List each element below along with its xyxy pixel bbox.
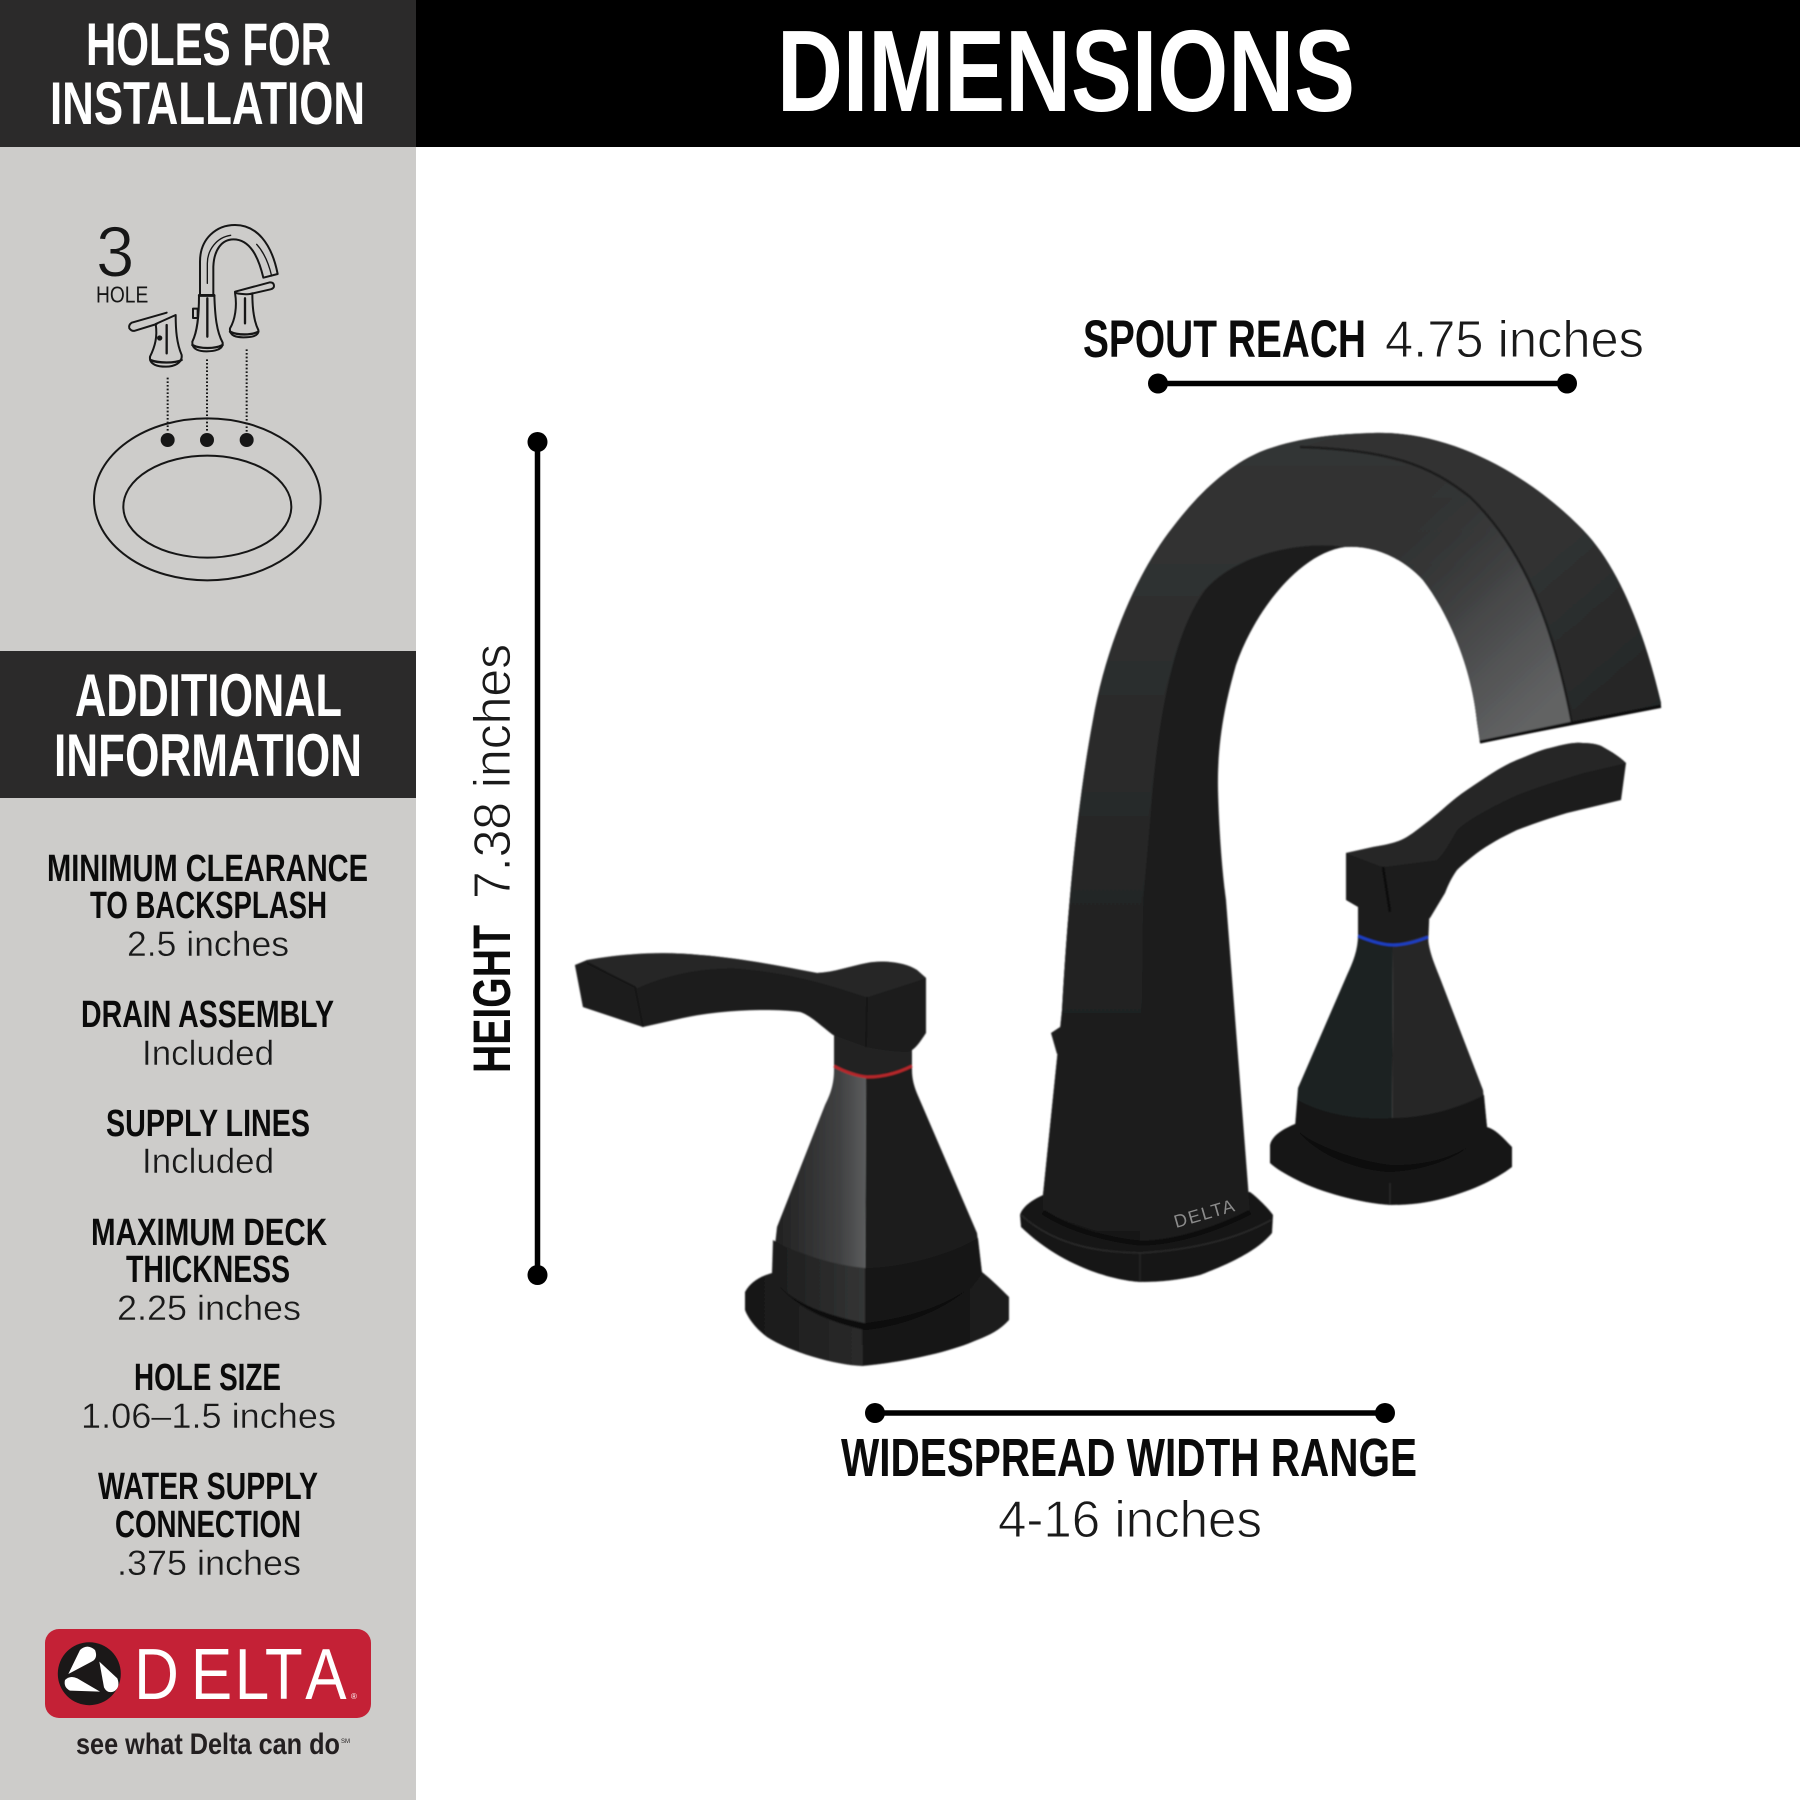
faucet: left handle — [575, 953, 1009, 1366]
dimension: height: 7.38 inches — [464, 644, 522, 899]
heading: holes for installation: INSTALLATION — [50, 70, 365, 137]
text block: supply lines: Included — [142, 1142, 274, 1181]
heading: holes for installation — [0, 0, 416, 147]
logo: delta: DELTA — [134, 1635, 347, 1715]
text block: minimum clearance: TO BACKSPLASH — [90, 885, 327, 927]
text block: hole size: 1.06–1.5 inches — [81, 1397, 336, 1436]
text block: hole size: HOLE SIZE — [134, 1357, 281, 1399]
panel: sidebar background — [0, 147, 416, 1800]
dimension: height: HEIGHT — [463, 925, 522, 1073]
text block: water supply connection — [98, 1466, 318, 1583]
text block: minimum clearance: 2.5 inches — [127, 925, 289, 964]
dimension: widespread width range: 4-16 inches — [998, 1491, 1262, 1549]
text block: maximum deck thickness: MAXIMUM DECK — [91, 1212, 327, 1254]
text block: maximum deck thickness: 2.25 inches — [117, 1289, 301, 1328]
faucet: right handle — [1270, 743, 1626, 1205]
text block: hole size — [81, 1357, 336, 1436]
heading: dimensions: DIMENSIONS — [777, 6, 1355, 136]
icon: 3 hole faucet and sink diagram: HOLE — [96, 281, 148, 307]
icon: 3 hole faucet and sink diagram — [94, 213, 321, 580]
heading: holes for installation: HOLES FOR — [86, 11, 331, 78]
dimension: widespread width range — [841, 1403, 1417, 1549]
text block: maximum deck thickness — [91, 1212, 327, 1328]
dimension: widespread width range: WIDESPREAD WIDTH RANGE — [841, 1428, 1417, 1488]
dimension: spout reach: 4.75 inches — [1385, 311, 1644, 369]
faucet: center spout — [1020, 433, 1661, 1282]
text block: drain assembly: DRAIN ASSEMBLY — [81, 994, 334, 1036]
text block: drain assembly: Included — [142, 1034, 274, 1073]
logo: delta: see what Delta can do — [76, 1728, 340, 1761]
text block: water supply connection: CONNECTION — [115, 1504, 301, 1546]
dimension: spout reach — [1083, 310, 1644, 394]
text block: minimum clearance: MINIMUM CLEARANCE — [47, 848, 368, 890]
dimension: height — [463, 432, 548, 1285]
text block: water supply connection: WATER SUPPLY — [98, 1466, 318, 1508]
label: delta mark on faucet: DELTA — [1172, 1196, 1237, 1232]
text block: minimum clearance — [47, 848, 368, 964]
text block: supply lines: SUPPLY LINES — [106, 1103, 310, 1145]
heading: additional information — [0, 651, 416, 798]
icon: 3 hole faucet and sink diagram: 3 — [96, 213, 134, 293]
heading: additional information: ADDITIONAL — [75, 662, 342, 729]
dimension: spout reach: SPOUT REACH — [1083, 310, 1366, 369]
text block: water supply connection: .375 inches — [117, 1544, 301, 1583]
heading: additional information: INFORMATION — [54, 722, 362, 789]
logo: delta: SM — [341, 1739, 350, 1745]
text block: maximum deck thickness: THICKNESS — [126, 1249, 290, 1291]
text block: drain assembly — [81, 994, 334, 1073]
heading: dimensions — [416, 0, 1800, 147]
text block: supply lines — [106, 1103, 310, 1181]
logo: delta: ® — [351, 1692, 357, 1701]
logo: delta — [45, 1629, 371, 1761]
